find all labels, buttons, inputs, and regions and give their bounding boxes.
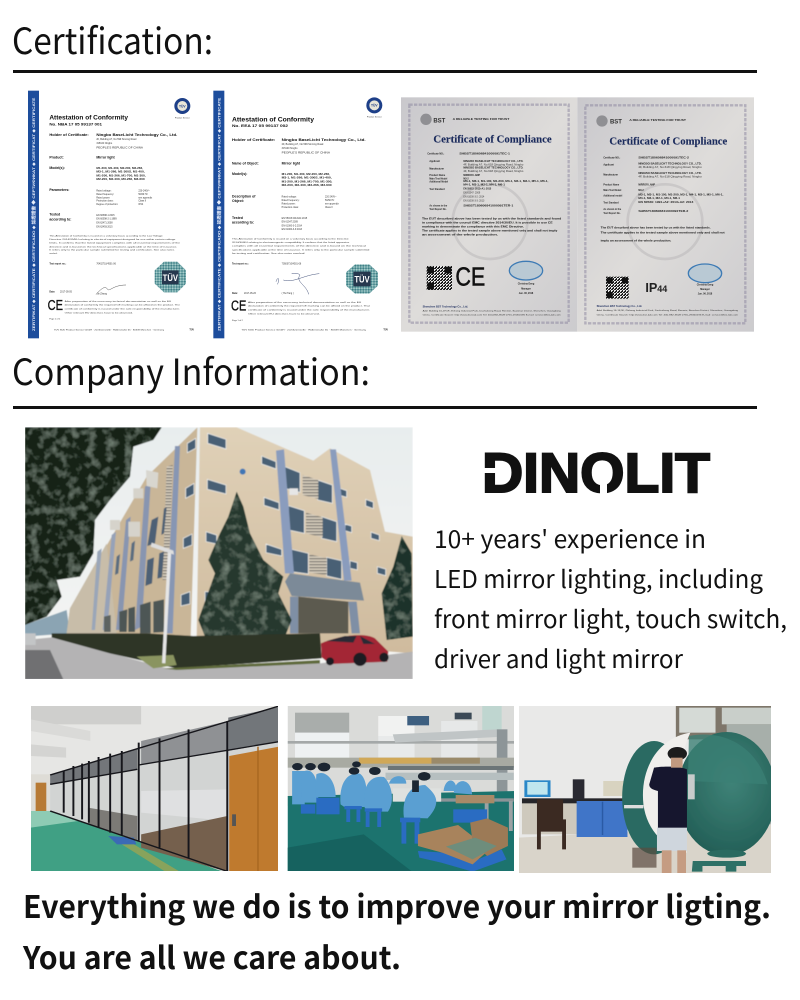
certificate: attestation of conformity NBA: Other relevant EU directives have to be observed.	[65, 311, 134, 314]
certificate photo: BST compliance with CE: Main Test Model	[429, 177, 448, 180]
certificate photo: BST compliance with IP44: Test Standard	[603, 201, 619, 204]
certificate: attestation of conformity NBA: Rated power:	[96, 196, 111, 199]
certificate: attestation of conformity NBA: 220-240V~	[138, 191, 150, 193]
certificate: attestation of conformity NBA: Ningbo BaseLicht Technology Co., Ltd.	[96, 133, 177, 137]
certificate: attestation of conformity EEA: Rated power:	[282, 202, 296, 205]
certificate: attestation of conformity EEA: Object:	[232, 199, 244, 203]
certificate: attestation of conformity EEA: 2017-05-26	[244, 293, 257, 295]
certificate photo: BST compliance with CE: NINGBO BASELICHT TECHNOLOGY CO., LTD.	[463, 160, 524, 163]
certificate: attestation of conformity NBA: M1-200, M1-400, M2-200, M2-266,	[96, 167, 143, 170]
certificate: attestation of conformity EEA: EN 61000-3-3:2013	[282, 229, 303, 231]
certificate photo: BST compliance with IP44: SHBST180606841000091TEC-2	[638, 157, 690, 160]
text: company description	[434, 521, 787, 676]
certificate: attestation of conformity NBA: M2-200, M2-400, M3-266, M3-600	[96, 178, 146, 181]
certificate: attestation of conformity NBA: After preparation of the necessary technical documentation as well as the EU	[65, 300, 172, 303]
certificate: attestation of conformity EEA: ZERTIFIKAT ◆ CERTIFICATE ◆ CERTIFICADO ◆ 認證證書 ◆ СЕРТИФИКАТ ◆ CERTIFICAT ◆ CERTIFICATE	[215, 97, 221, 331]
certificate: attestation of conformity EEA: 2014/30/EU relating to electromagnetic compatibility. It confirms that the listed apparatus	[232, 241, 349, 244]
certificate: attestation of conformity NBA: Page 1 of 2	[49, 319, 61, 321]
certificate: attestation of conformity EEA: TÜV	[383, 329, 388, 332]
certificate photo: BST compliance with CE: BST	[433, 118, 446, 124]
certificate photo: BST compliance with CE: EN 61000-3-3: 2013	[463, 200, 485, 202]
certificate photo: BST compliance with IP44: As shown in the	[603, 208, 622, 211]
certificate photo: BST compliance with CE: SHBST180606841000091TEC-1	[459, 152, 511, 155]
logo: DINOLIT: DINOLIT	[482, 441, 710, 504]
certificate: attestation of conformity EEA: 315100 Ningbo	[282, 148, 298, 150]
certificate photo: BST compliance with CE: Certificate NO.:	[427, 152, 445, 155]
certificate: attestation of conformity NBA: Directive 2014/35/EU relating to electrical equipment designed for use within certain voltage	[49, 238, 177, 241]
certificate: attestation of conformity NBA: Jie Zhang	[97, 293, 108, 295]
photo: LED assembly workshop	[288, 706, 518, 872]
tagline: Everything we do is to improve your mirror ligting.	[23, 882, 771, 927]
certificate photo: BST compliance with IP44: 4F, Building A7, No.618 Qingying Road, Ningbo	[638, 166, 703, 169]
certificate photo: BST compliance with IP44: China. Certificate Search: http://www.bst-lab.com Tel: 400-882-9628 0755-29060196 E-mail: service@bst-lab.com	[597, 313, 738, 316]
certificate photo: BST compliance with IP44: The EUT described above has been tested by us with the listed standards.	[601, 225, 711, 229]
certificate: attestation of conformity NBA: TÜV	[163, 273, 179, 283]
certificate: attestation of conformity EEA: 2F, Building A7, No.599 Sinning Road	[282, 143, 324, 146]
certificate photo: BST compliance with IP44: Main Test Model	[603, 189, 622, 192]
text: company description: LED mirror lighting, including	[434, 561, 763, 596]
certificate: attestation of conformity EEA: complies with all essential requirements of the directive and is based on the technical	[232, 245, 367, 248]
certificate: attestation of conformity NBA	[27, 89, 200, 340]
certificate: attestation of conformity NBA: 2017-05-05	[60, 292, 73, 294]
certificate photo: BST compliance with IP44: Add: Building 16-1F,5F, Zhihong Industrial Park, Dashuikeng Road, Renmin, Baoshan District, Shenzhen, Guangdong	[597, 309, 739, 312]
certificate: attestation of conformity NBA: according to:	[49, 218, 71, 222]
certificate: attestation of conformity EEA: certificate of conformity is issued under the sole responsibility of the manufacturer.	[248, 308, 371, 311]
certificate: attestation of conformity EEA: M2-200, M2-400, M3-266, M3-600	[282, 184, 333, 187]
certificate photo: BST compliance with CE: M4-1, M3-1, M2-1, M4-1, M6-1	[463, 183, 506, 186]
certificate: attestation of conformity EEA: CE	[231, 299, 246, 315]
certificate photo: BST compliance with CE: Add: Building 16-1F,5F, Zhihong Industrial Park, Dashuikeng Road, Renmin, Baoshan District, Shenzhen, Guangdong	[423, 309, 562, 312]
certificate photo: BST compliance with IP44: M3-2	[638, 190, 644, 192]
text: company description: front mirror light, touch switch,	[434, 601, 787, 636]
certificate photo: BST compliance with IP44: Manager	[700, 289, 710, 291]
certificate photo: BST compliance with CE: Test Standard	[429, 188, 445, 191]
certificate: attestation of conformity NBA: It refers only to the particular sample submitted for testing and certification. See also notes	[49, 249, 174, 252]
certificate photo: BST compliance with IP44: BST	[610, 119, 622, 125]
heading rule: Certification	[13, 70, 757, 73]
certificate: attestation of conformity EEA: EN 61547:2009	[282, 222, 299, 224]
certificate: attestation of conformity EEA	[212, 89, 397, 340]
certificate: attestation of conformity NBA: TÜV SÜD Product Service GmbH · Zertifizierstelle · Ridlerstraße 65 · 80339 München · Germany	[54, 329, 165, 332]
certificate: attestation of conformity EEA: This Attestation of Conformity is issued on a voluntary basis according to the Directive	[232, 237, 350, 240]
tagline: You are all we care about.	[22, 933, 401, 978]
certificate: attestation of conformity EEA: Other relevant EU directives have to be observed.	[248, 312, 320, 315]
certificate photo: BST compliance with CE: in compliance with the council EMC directive 2014/30/EU. It is possible to use CE	[422, 221, 553, 225]
certificate photo: BST compliance with CE: marking to demonstrate the compliance with this EMC Directive.	[422, 225, 524, 229]
certificate: attestation of conformity EEA: Rated frequency:	[282, 199, 300, 202]
text: company description: 10+ years' experience in	[434, 521, 706, 556]
certificate: attestation of conformity NBA: overleaf.	[49, 252, 58, 255]
certificate photo: BST compliance with CE: Test Report No.	[429, 208, 447, 211]
certificate: attestation of conformity EEA: Test report no.:	[232, 262, 249, 265]
certificate: attestation of conformity NBA: No. NBA 17 05 99137 001	[49, 122, 102, 126]
certificate photo: BST compliance with IP44: 4F, Building A7, No.618 Qingying Road, Ningbo	[638, 175, 703, 178]
certificate photo: BST compliance with IP44: Test Report No.	[603, 212, 621, 215]
certificate photo: BST compliance with CE: Manager	[521, 289, 531, 291]
certificate photo: BST compliance with CE: Shenzhen BST Technology Co., Ltd.	[423, 304, 468, 308]
certificate: attestation of conformity EEA: according to:	[232, 221, 254, 225]
certificate: attestation of conformity NBA: 70402710/4501-06	[96, 263, 117, 265]
certificate: attestation of conformity NBA: TÜV	[179, 104, 186, 108]
certificate: attestation of conformity EEA: M1-200, M1-400, M2-200, M2-266,	[282, 173, 330, 176]
certificate: attestation of conformity NBA: Product Service	[175, 116, 191, 119]
certificate: attestation of conformity EEA: specifications applicable at the time of issuance. It refers only to the particular sample submitted	[232, 248, 371, 251]
certificate photo: BST compliance with CE: NINGBO BASELICHT TECHNOLOGY CO., LTD.	[463, 167, 524, 170]
certificate: attestation of conformity NBA: PEOPLE'S REPUBLIC OF CHINA	[96, 146, 144, 149]
certificate photo: BST compliance with IP44: The certificate applies to the tested sample above mentioned only and shall not	[601, 231, 725, 235]
certificate photo: BST compliance with CE: SHBST180606841000091TER-1	[463, 205, 514, 208]
certificate: attestation of conformity NBA: see appendix	[138, 197, 153, 199]
certificate photo: BST compliance with IP44: imply an assessment of the whole production.	[601, 238, 672, 242]
certificate: attestation of conformity NBA: ZERTIFIKAT ◆ CERTIFICATE ◆ CERTIFICADO ◆ 認證證書 ◆ СЕРТИФИКАТ ◆ CERTIFICAT ◆ CERTIFICATE	[30, 97, 36, 331]
certificate: attestation of conformity EEA: Rated voltage:	[282, 196, 297, 199]
certificate photo: BST compliance with IP44: A RELIABLE TESTING FOR TRUST	[629, 119, 687, 122]
certificate: attestation of conformity NBA: IP44	[138, 204, 144, 206]
certificate photo: BST compliance with CE: M3-1, M3-1, M1-100, M1-200, M3-1, M4-1, M3-1, M5-1, M6-1,	[463, 180, 549, 183]
certificate: attestation of conformity NBA: Attestation of Conformity	[49, 115, 128, 122]
certificate: attestation of conformity EEA: TÜV SÜD Product Service GmbH · Zertifizierstelle · Ridlerstraße 65 · 80339 München · Germany	[241, 329, 367, 332]
certificate: attestation of conformity EEA: M3-1, M1-266, M1-300S, M1-400,	[282, 177, 332, 180]
certificate: attestation of conformity NBA: 2F, Building A7, No.599 Sinning Road	[96, 138, 137, 141]
certificate: attestation of conformity EEA: Class II	[325, 207, 333, 209]
certificate: attestation of conformity NBA: Mirror light	[96, 156, 116, 160]
certificate: attestation of conformity NBA: Model(s):	[49, 166, 65, 170]
text: company description: driver and light mirror	[434, 641, 683, 676]
heading: Company Information: Company Information:	[12, 344, 370, 396]
certificate photo: BST compliance with CE: China. Certificate Search: http://www.bst-lab.com Tel: 400-882-9628 0755-29060196 E-mail: service@bst-lab.com	[423, 314, 561, 317]
certificate: attestation of conformity EEA: ( Hui Tang )	[282, 293, 294, 295]
certificate: attestation of conformity EEA: Description of	[232, 194, 256, 198]
certificate photo: BST compliance with CE: Additional Model	[429, 181, 448, 184]
certificate photo: BST compliance with CE: M3-2	[463, 178, 469, 180]
certificate photo: BST compliance with IP44: Manufacturer	[603, 173, 618, 176]
certificate photo: BST compliance with IP44: IP44	[645, 281, 667, 295]
certificate photo: BST compliance with IP44: Christina Deng	[697, 283, 714, 286]
certificate photo: BST compliance with CE: A RELIABLE TESTING FOR TRUST	[453, 118, 510, 121]
certificate: attestation of conformity NBA: Class II	[138, 201, 146, 203]
certificate photo: BST compliance with CE: The certificate applies to the tested sample above mentioned only and shall not imply	[422, 229, 558, 233]
certificate: attestation of conformity EEA: Page 1 of 2	[232, 320, 244, 322]
certificate photo: BST compliance with IP44: NINGBO BASELICHT TECHNOLOGY CO., LTD.	[638, 163, 702, 166]
certificate photo: BST compliance with IP44: Jun. 06, 2018	[698, 293, 713, 295]
certificate: attestation of conformity NBA: M1-200, M1-266, M1-700, M1-300,	[96, 175, 146, 177]
certificate: attestation of conformity NBA: M3-1, M1-266, M1-300S, M1-400,	[96, 171, 145, 174]
certificate: attestation of conformity EEA: for testing and certification. See also notes overleaf.	[232, 252, 306, 255]
certificate: attestation of conformity EEA: Date:	[232, 292, 238, 295]
certificate: attestation of conformity EEA: Tested	[232, 216, 243, 220]
heading: Certification: Certification:	[12, 13, 213, 65]
certificate photo: BST compliance with IP44: Applicant	[603, 163, 614, 166]
certificate: attestation of conformity EEA: M1-200, M1-266, M1-700, M1-300,	[282, 181, 333, 183]
certificate: attestation of conformity EEA: 50/60 Hz	[325, 200, 335, 202]
certificate: attestation of conformity NBA: limits. It confirms that the listed equipment complies with all essential requirements of the	[49, 242, 181, 245]
certificate: attestation of conformity NBA: TÜV	[189, 329, 194, 332]
certificate: attestation of conformity NBA: 50/60 Hz	[138, 194, 148, 196]
certificate: attestation of conformity NBA: EN 62493:2015	[96, 226, 113, 228]
certificate photo: BST compliance with IP44	[577, 97, 754, 332]
certificate photo: BST compliance with CE: EN 61000-3-2: 2014	[463, 196, 485, 198]
certificate: attestation of conformity NBA: directive and is based on the technical specifications applicable at the time of issuance.	[49, 245, 178, 248]
certificate: attestation of conformity EEA: 220-240V~	[325, 197, 337, 199]
certificate photo: BST compliance with CE: an assessment of the whole production.	[422, 233, 498, 237]
certificate: attestation of conformity NBA: EN 60598-2-1:1989	[96, 218, 117, 220]
certificate: attestation of conformity EEA: No. EEA 17 05 99137 002	[232, 124, 288, 128]
certificate photo: BST compliance with CE: EN 61547: 2009	[463, 192, 481, 194]
certificate: attestation of conformity NBA: EN 60598-1:2015	[96, 215, 115, 217]
certificate: attestation of conformity NBA: Degree of protection:	[96, 203, 118, 206]
certificate photo: BST compliance with CE: EN 55015: 2013+A1: 2015	[463, 187, 492, 190]
photo: integrating sphere test lab	[519, 706, 776, 874]
certificate: attestation of conformity EEA: TÜV	[371, 104, 378, 108]
certificate photo: BST compliance with CE: The EUT described above has been tested by us with the listed standards and found	[422, 217, 562, 221]
certificate photo: BST compliance with IP44: MIRROR LAMP	[638, 183, 655, 186]
photo: factory building exterior	[25, 427, 413, 679]
certificate photo: BST compliance with CE: Product Name	[429, 174, 446, 177]
certificate: attestation of conformity EEA: Holder of Certificate:	[232, 138, 275, 142]
certificate photo: BST compliance with CE: As shown in the	[429, 205, 448, 208]
certificate photo: BST compliance with IP44: Shenzhen BST Technology Co., Ltd.	[597, 304, 642, 308]
photo: office corridor with glass wall	[31, 706, 280, 873]
certificate photo: BST compliance with IP44: M3-1, M3-1, M1-100, M1-200, M3-1, M4-1, M3-1, M5-1, M6-1,	[638, 194, 724, 197]
certificate photo: BST compliance with CE	[401, 97, 577, 332]
certificate: attestation of conformity NBA: 315100 Ningbo	[96, 143, 113, 145]
certificate: attestation of conformity NBA: Rated voltage:	[96, 190, 112, 193]
certificate: attestation of conformity EEA: EN 55015:2013/A1:2015	[282, 217, 308, 220]
certificate photo: BST compliance with IP44: EN 60529: 1991+A2: 2013+A2: 2013	[638, 201, 694, 204]
certificate photo: BST compliance with IP44: SHBST180606841000091TER-2	[638, 210, 689, 213]
certificate: attestation of conformity EEA: Product Service	[367, 116, 383, 119]
certificate photo: BST compliance with CE: Christina Deng	[518, 283, 535, 286]
certificate: attestation of conformity EEA: TÜV	[354, 275, 370, 285]
tagline	[22, 882, 771, 978]
certificate: attestation of conformity NBA: Test report no.:	[49, 262, 66, 265]
certificate: attestation of conformity NBA: CE	[48, 298, 63, 314]
certificate: attestation of conformity NBA: Protection class:	[96, 200, 114, 203]
certificate: attestation of conformity EEA: declaration of conformity the required CE marking can be affixed on the product. That	[248, 305, 371, 308]
certificate: attestation of conformity NBA: Holder of Certificate:	[49, 133, 89, 137]
certificate: attestation of conformity NBA: declaration of conformity the required CE marking can be affixed on the product. The	[65, 304, 181, 307]
certificate: attestation of conformity NBA: EN 62471:2008	[96, 222, 113, 224]
certificate: attestation of conformity NBA: certificate of conformity is issued under the sole responsibility of the manufacturer.	[65, 307, 181, 310]
certificate photo: BST compliance with IP44: NINGBO BASELICHT TECHNOLOGY CO., LTD.	[638, 172, 702, 175]
certificate: attestation of conformity NBA: Product:	[49, 156, 64, 160]
certificate photo: BST compliance with CE: 4F, Building A7, No.618 Qingying Road, Ningbo	[463, 170, 524, 173]
certificate: attestation of conformity NBA: Tested	[49, 213, 60, 217]
certificate photo: BST compliance with IP44: Additional model	[603, 195, 623, 198]
certificate photo: BST compliance with CE: CE	[455, 261, 485, 291]
certificate photo: BST compliance with CE: Applicant	[429, 160, 440, 163]
certificate photo: BST compliance with IP44: Certificate NO.:	[603, 157, 621, 160]
certificate: attestation of conformity NBA: This Attestation of Conformity is issued on a voluntary basis according to the Low Voltage	[49, 235, 164, 238]
certificate: attestation of conformity EEA: EN 61000-3-2:2014	[282, 225, 303, 227]
certificate photo: BST compliance with IP44: Product Name	[603, 183, 620, 186]
certificate: attestation of conformity EEA: After preparation of the necessary technical documentation as well as the EU	[248, 301, 362, 304]
certificate: attestation of conformity EEA: PEOPLE'S REPUBLIC OF CHINA	[282, 152, 331, 155]
certificate: attestation of conformity EEA: Model(s):	[232, 172, 247, 176]
certificate: attestation of conformity EEA: see appendix	[325, 203, 340, 205]
certificate: attestation of conformity EEA: Name of Object:	[232, 161, 259, 165]
certificate photo: BST compliance with CE: MIRROR LAMP	[463, 174, 480, 177]
certificate: attestation of conformity NBA: Parameters:	[49, 188, 69, 192]
certificate: attestation of conformity EEA: Mirror light	[282, 161, 301, 165]
certificate: attestation of conformity EEA: Protection class:	[282, 206, 299, 209]
certificate: attestation of conformity EEA: Attestation of Conformity	[232, 116, 314, 123]
certificate photo: BST compliance with CE: Manufacturer	[429, 167, 444, 170]
certificate photo: BST compliance with IP44: Certificate of Compliance	[609, 135, 727, 147]
heading rule: Company Information	[13, 406, 757, 409]
certificate: attestation of conformity NBA: Rated frequency:	[96, 193, 114, 196]
certificate photo: BST compliance with CE: 4F, Building A7, No.618 Qingying Road, Ningbo	[463, 163, 524, 166]
certificate photo: BST compliance with CE: Jun. 06, 2018	[519, 293, 534, 295]
certificate: attestation of conformity EEA: 70500710/4501-06	[282, 263, 302, 265]
certificate: attestation of conformity NBA: Date:	[49, 291, 55, 294]
certificate photo: BST compliance with CE: Certificate of Compliance	[433, 134, 552, 146]
certificate photo: BST compliance with IP44: M4-1, M3-1, M2-1, M4-1, M6-1	[638, 197, 681, 200]
certificate: attestation of conformity EEA: Ningbo BaseLicht Technology Co., Ltd.	[282, 138, 366, 142]
